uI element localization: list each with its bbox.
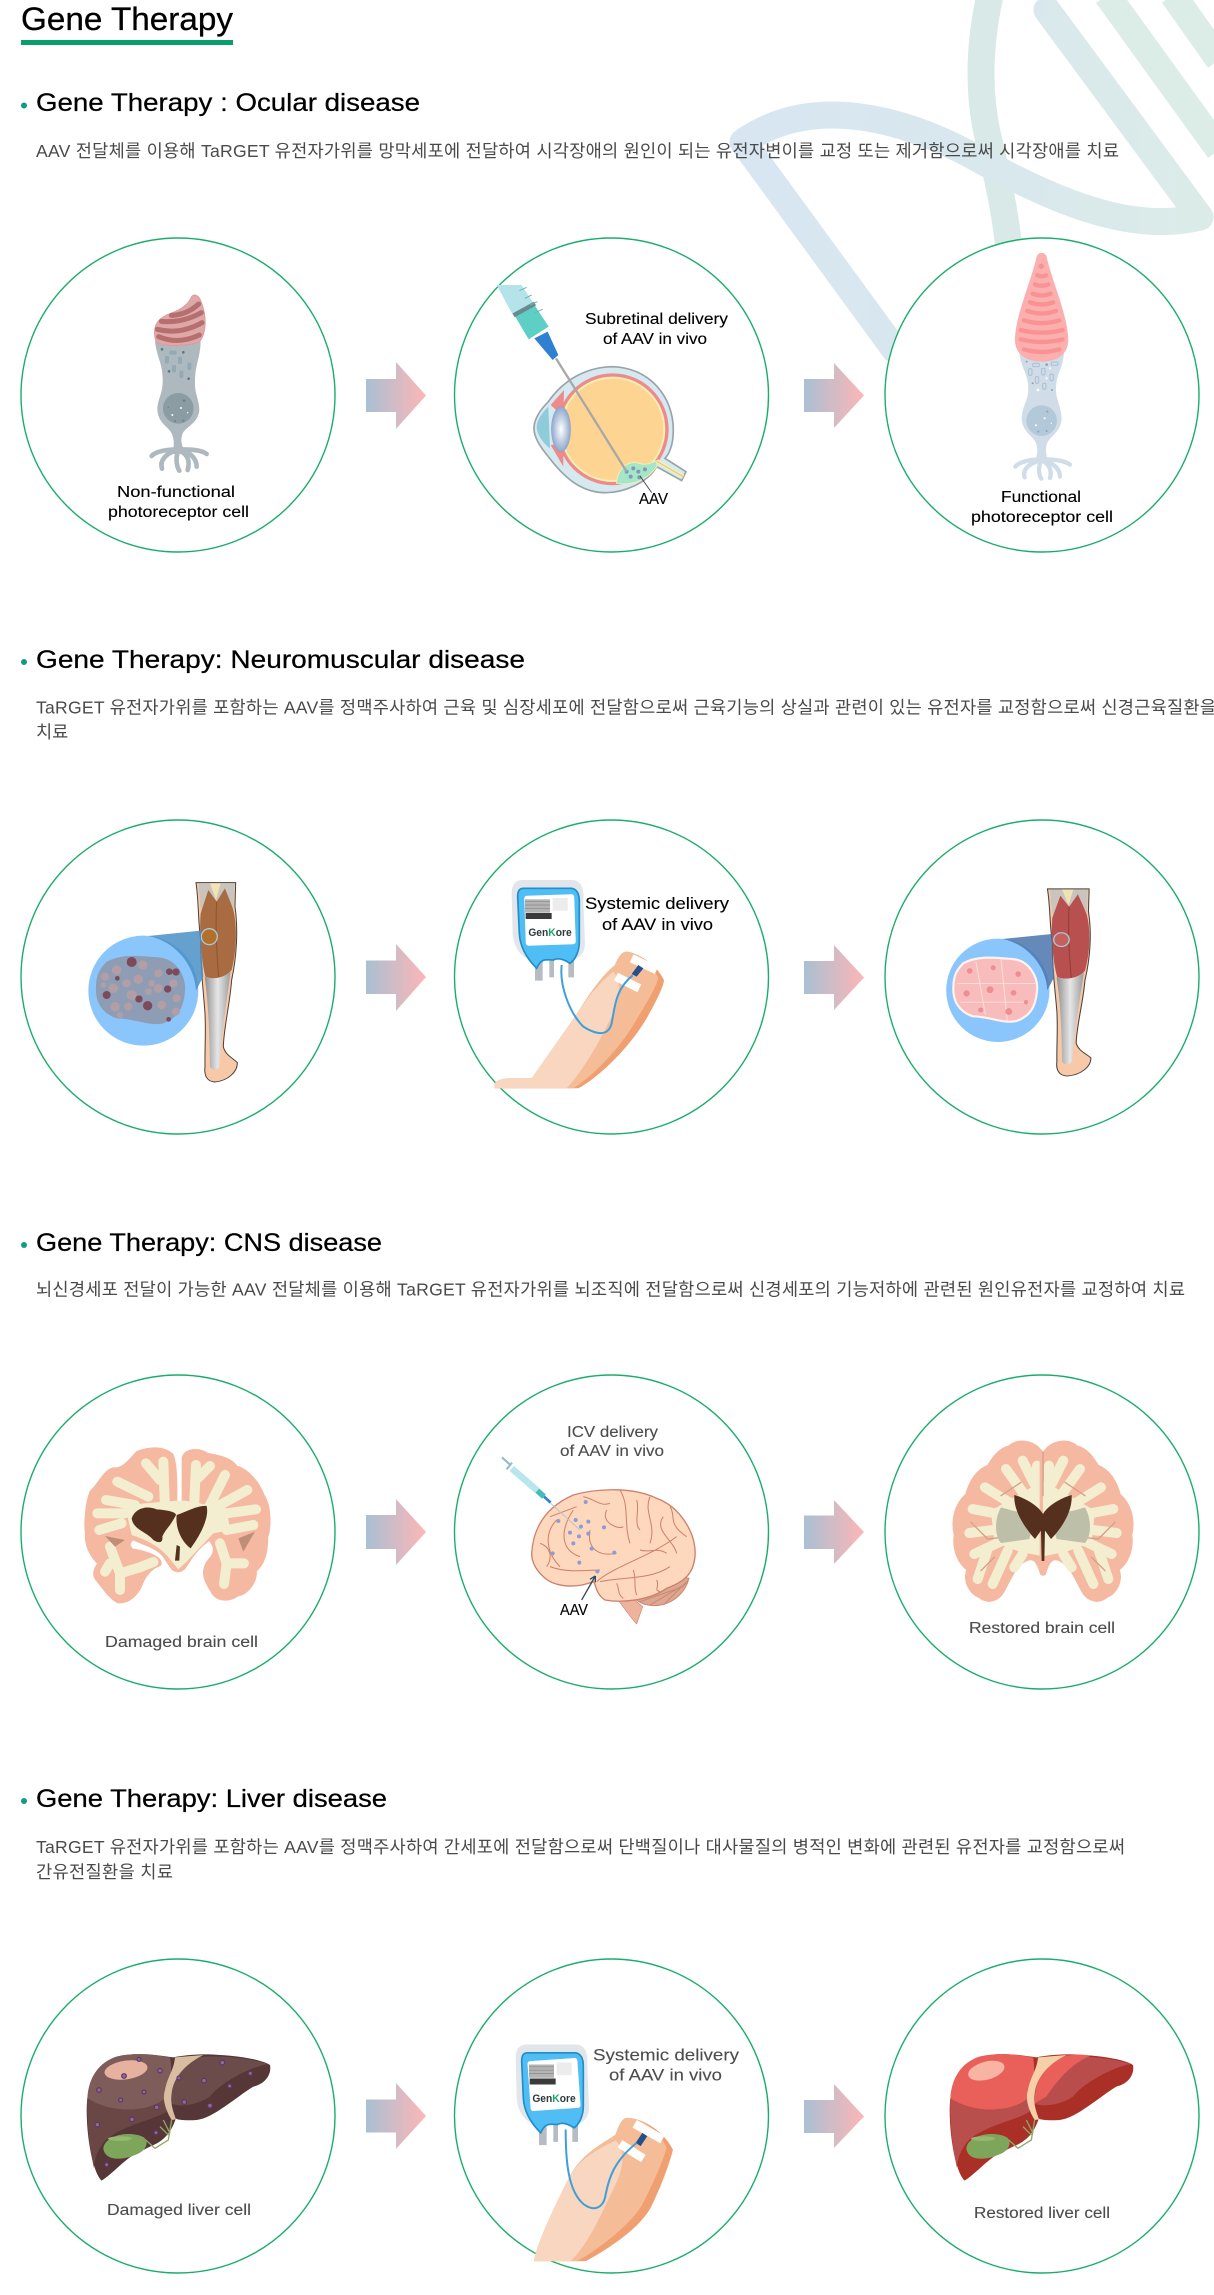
arrow — [804, 363, 864, 428]
panel: CNS disease — [21, 1229, 1199, 1689]
description: neuromuscular: TaRGET 유전자가위를 포함하는 AAV를 정맥주사하여 근육 및 심장세포에 전달함으로써 근육기능의 상실과 관련이 있는 유전자를 교정함으로써 신경근육질환을 — [36, 698, 1214, 718]
label: systemic delivery — [593, 2046, 740, 2084]
description: neuromuscular: 치료 — [36, 722, 68, 742]
heading: CNS: Gene Therapy: CNS disease — [36, 1229, 382, 1257]
label: restored brain cell: Restored brain cell — [969, 1620, 1115, 1637]
heading: liver: Gene Therapy: Liver disease — [36, 1785, 387, 1813]
circle: restored brain — [885, 1375, 1199, 1689]
label: AAV: AAV — [639, 491, 669, 508]
label: subretinal delivery — [585, 311, 728, 348]
label: AAV: AAV — [560, 1602, 589, 1619]
icon: healthy tissue magnifier — [946, 934, 1054, 1042]
circle: restored liver — [885, 1959, 1199, 2273]
panel: neuromuscular disease — [21, 646, 1214, 1134]
description: liver: 간유전질환을 치료 — [36, 1862, 173, 1882]
icon: syringe — [497, 285, 558, 360]
icon: restored liver — [950, 2054, 1133, 2181]
icon: leg with restored calf — [1047, 889, 1091, 1076]
arrow — [366, 1499, 426, 1565]
label: functional: photoreceptor cell — [971, 509, 1113, 526]
circle: non-functional photoreceptor cell — [21, 238, 335, 552]
logo: GenKore: GenKore — [528, 927, 572, 939]
description: neuromuscular — [36, 698, 1214, 742]
label: ICV delivery — [560, 1424, 664, 1460]
label: systemic delivery: of AAV in vivo — [609, 2066, 722, 2084]
label: damaged liver cell: Damaged liver cell — [107, 2202, 251, 2219]
panel: ocular disease — [21, 89, 1199, 552]
label: subretinal delivery: of AAV in vivo — [603, 331, 707, 348]
background: DNA helix ribbons — [743, 0, 1214, 350]
circle: damaged liver — [21, 1959, 335, 2273]
arrow — [804, 2084, 864, 2148]
description: ocular: AAV 전달체를 이용해 TaRGET 유전자가위를 망막세포에 전달하여 시각장애의 원인이 되는 유전자변이를 교정 또는 제거함으로써 시각장애를 치료 — [36, 141, 1119, 161]
circle: restored muscle — [885, 820, 1199, 1134]
heading: neuromuscular: Gene Therapy: Neuromuscular disease — [36, 646, 525, 674]
label: non-functional: Non-functional — [117, 484, 235, 501]
icon: restored brain section — [956, 1444, 1130, 1598]
arrow — [804, 1500, 864, 1564]
icon: damaged brain section — [88, 1451, 267, 1600]
circle: functional photoreceptor cell — [885, 238, 1199, 552]
icon: leg with damaged calf — [196, 883, 237, 1082]
circle: systemic delivery — [454, 1959, 768, 2273]
circle: damaged brain — [21, 1375, 335, 1689]
icon: infusion bag — [512, 880, 585, 981]
description: liver: TaRGET 유전자가위를 포함하는 AAV를 정맥주사하여 간세포에 전달함으로써 단백질이나 대사물질의 병적인 변화에 관련된 유전자를 교정함으로써 — [36, 1837, 1125, 1857]
label: subretinal delivery: Subretinal delivery — [585, 311, 728, 328]
logo: GenKore: GenKore — [532, 2093, 576, 2105]
icon: arm with catheter — [534, 2118, 673, 2261]
circle: ICV delivery — [454, 1375, 768, 1689]
description: liver — [36, 1837, 1125, 1882]
label: functional — [971, 489, 1113, 526]
circle: subretinal delivery — [454, 238, 768, 552]
label: non-functional — [108, 484, 249, 521]
arrow — [804, 945, 864, 1010]
heading: ocular: Gene Therapy : Ocular disease — [36, 89, 420, 117]
icon: tissue magnifier — [88, 931, 203, 1046]
circle: diseased muscle — [21, 820, 335, 1134]
label: damaged brain cell: Damaged brain cell — [105, 1634, 258, 1651]
panel: liver disease — [21, 1785, 1199, 2273]
label: systemic delivery: of AAV in vivo — [602, 915, 713, 934]
label: systemic delivery: Systemic delivery — [585, 894, 730, 913]
arrow — [366, 362, 426, 429]
label: systemic delivery: Systemic delivery — [593, 2046, 740, 2064]
icon: syringe — [502, 1457, 580, 1530]
circle: systemic delivery — [454, 820, 768, 1134]
label: non-functional: photoreceptor cell — [108, 504, 249, 521]
label: systemic delivery — [585, 894, 730, 934]
arrow — [366, 944, 426, 1011]
icon: brain side view — [532, 1490, 695, 1624]
label: ICV delivery: ICV delivery — [567, 1424, 658, 1441]
icon: infusion bag — [516, 2044, 589, 2145]
arrow — [366, 2083, 426, 2149]
icon: damaged liver — [87, 2054, 270, 2181]
title: Gene Therapy — [21, 1, 233, 37]
label: restored liver cell: Restored liver cell — [974, 2205, 1110, 2222]
label: functional: Functional — [1001, 489, 1081, 506]
label: ICV delivery: of AAV in vivo — [560, 1443, 664, 1460]
icon: arm with catheter — [494, 952, 664, 1088]
description: CNS: 뇌신경세포 전달이 가능한 AAV 전달체를 이용해 TaRGET 유전자가위를 뇌조직에 전달함으로써 신경세포의 기능저하에 관련된 원인유전자를 교정하여 치료 — [36, 1280, 1185, 1300]
icon: eye cross-section — [534, 358, 686, 493]
